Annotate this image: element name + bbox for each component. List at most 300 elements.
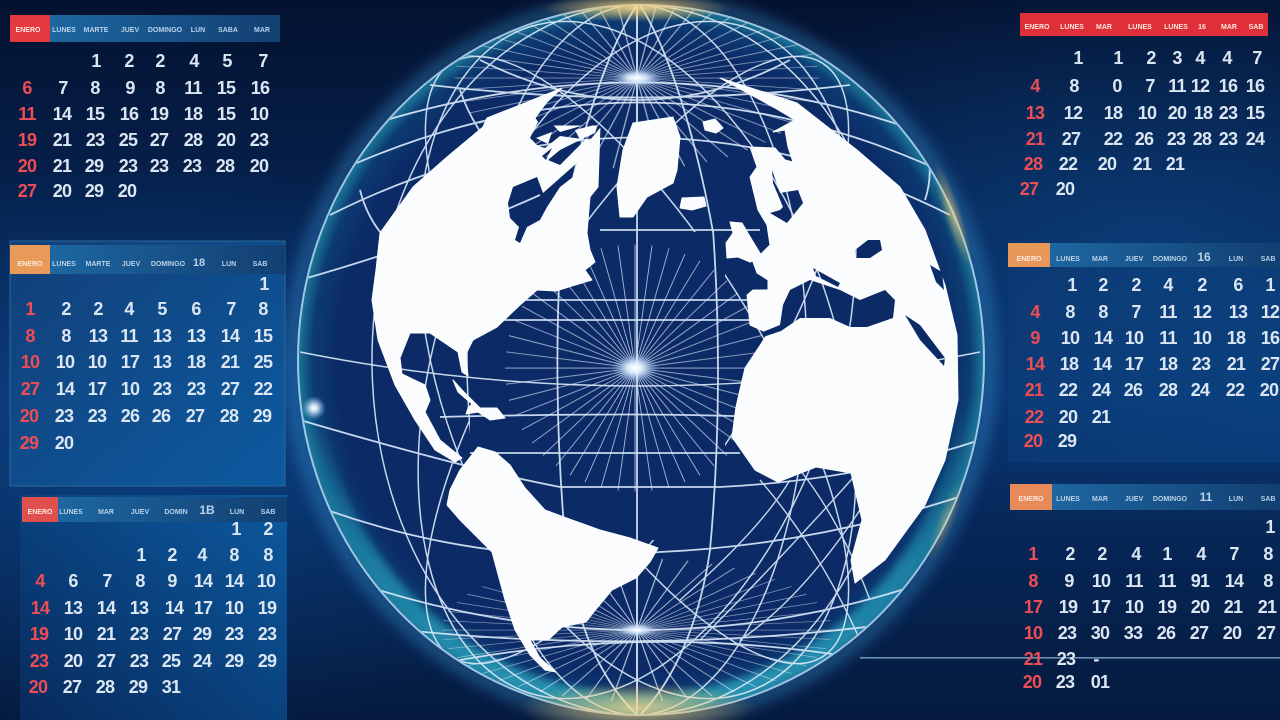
dates: 15 [217, 104, 236, 124]
dates: 7 [1145, 76, 1155, 96]
dates: 23 [1192, 354, 1211, 374]
dates: 20 [55, 433, 74, 453]
dates: 27 [1190, 623, 1209, 643]
dates: 23 [183, 156, 202, 176]
calendar: middle right: SAB [1261, 256, 1275, 263]
dates: 23 [86, 130, 105, 150]
dates: 24 [1092, 380, 1111, 400]
dates: 28 [96, 677, 115, 697]
header bar [22, 497, 287, 522]
dates: 21 [53, 156, 72, 176]
dates: 20 [1024, 431, 1043, 451]
calendar: top right: MAR [1221, 24, 1237, 31]
dates: 27 [97, 651, 116, 671]
dates: 29 [193, 624, 212, 644]
dates: 17 [1092, 597, 1111, 617]
dates: 24 [1246, 129, 1265, 149]
dates: 8 [155, 78, 165, 98]
dates: 20 [29, 677, 48, 697]
dates: 18 [1060, 354, 1079, 374]
dates: 14 [194, 571, 213, 591]
dates: 1 [91, 51, 101, 71]
dates: 29 [85, 181, 104, 201]
dates: 23 [225, 624, 244, 644]
dates: 29 [1058, 431, 1077, 451]
calendar: top left [10, 15, 280, 201]
bright star points [302, 70, 661, 636]
calendar: middle right [1008, 243, 1280, 463]
dates: 1 [1162, 544, 1172, 564]
dates: 10 [1125, 328, 1144, 348]
dates: 9 [1030, 328, 1040, 348]
calendar: top left: LUN [191, 27, 205, 34]
dates: 21 [221, 352, 240, 372]
dates: 7 [102, 571, 112, 591]
dates: 14 [97, 598, 116, 618]
calendar: bottom right: MAR [1092, 496, 1108, 503]
dates: 2 [155, 51, 165, 71]
dates: 29 [20, 433, 39, 453]
dates: 18 [1194, 103, 1213, 123]
calendar: bottom left: LUNES [59, 509, 83, 516]
dates: 21 [1258, 597, 1277, 617]
dates: 17 [121, 352, 140, 372]
dates: 4 [189, 51, 199, 71]
dates: 13 [64, 598, 83, 618]
dates: 2 [1131, 275, 1141, 295]
dates: 2 [167, 545, 177, 565]
dates: 20 [1223, 623, 1242, 643]
ray bursts [442, 0, 832, 702]
dates: 20 [1260, 380, 1279, 400]
calendar: top left: MARTE [84, 27, 109, 34]
calendar: bottom right: LUNES [1056, 496, 1080, 503]
dates [1020, 48, 1265, 199]
dates [1023, 517, 1277, 692]
dates: 8 [25, 326, 35, 346]
dates: 18 [184, 104, 203, 124]
dates: 6 [1233, 275, 1243, 295]
dates: 20 [1168, 103, 1187, 123]
dates: 26 [1124, 380, 1143, 400]
dates: 23 [130, 651, 149, 671]
calendar: bottom right: 11 [1200, 490, 1213, 504]
horizontal light line [860, 657, 1280, 659]
dates: 14 [1225, 571, 1244, 591]
calendar: top right: ENERO [1025, 24, 1050, 31]
dates: 19 [18, 130, 37, 150]
dates: 10 [1092, 571, 1111, 591]
dates: 14 [221, 326, 240, 346]
dates: 7 [258, 51, 268, 71]
dates: 8 [263, 545, 273, 565]
dates: 10 [1138, 103, 1157, 123]
calendar: top right: 16 [1198, 24, 1206, 31]
dates: 19 [258, 598, 277, 618]
dates: 27 [1257, 623, 1276, 643]
dates: 4 [197, 545, 207, 565]
dates: 19 [150, 104, 169, 124]
dates: 1 [1067, 275, 1077, 295]
dates: 16 [1219, 76, 1238, 96]
dates: 20 [1023, 672, 1042, 692]
dates: 18 [1104, 103, 1123, 123]
dates: 9 [125, 78, 135, 98]
land: Iceland [680, 197, 706, 210]
dates: 2 [1146, 48, 1156, 68]
dates: 16 [120, 104, 139, 124]
dates: 26 [152, 406, 171, 426]
calendar: top left: ENERO [16, 27, 41, 34]
dates: 8 [61, 326, 71, 346]
land masses [372, 78, 958, 672]
dates: 28 [1193, 129, 1212, 149]
dates: 2 [93, 299, 103, 319]
dates: 20 [1059, 407, 1078, 427]
dates: 10 [1125, 597, 1144, 617]
dates: 14 [53, 104, 72, 124]
dates: 17 [1024, 597, 1043, 617]
dates: 29 [225, 651, 244, 671]
dates: 14 [31, 598, 50, 618]
dates: 1 [1073, 48, 1083, 68]
dates: 18 [187, 352, 206, 372]
calendar: top left: JUEV [121, 27, 139, 34]
dates: 21 [97, 624, 116, 644]
dates: 20 [64, 651, 83, 671]
dates: 8 [1263, 544, 1273, 564]
dates: 24 [193, 651, 212, 671]
dates: 8 [1028, 571, 1038, 591]
dates: 20 [1098, 154, 1117, 174]
dates: 23 [187, 379, 206, 399]
dates: 20 [20, 406, 39, 426]
dates: 13 [130, 598, 149, 618]
land: Greenland [617, 117, 680, 217]
dates: 12 [1064, 103, 1083, 123]
land: North America [372, 88, 600, 462]
dates: 4 [1030, 76, 1040, 96]
calendar: bottom left: LUN [230, 509, 244, 516]
dates: 20 [118, 181, 137, 201]
header bar [10, 245, 285, 274]
dates: 22 [1059, 380, 1078, 400]
dates: 4 [35, 571, 45, 591]
calendar: bottom right [1010, 484, 1280, 692]
dates [18, 51, 270, 201]
dates: 12 [1193, 302, 1212, 322]
dates: 10 [56, 352, 75, 372]
dates: 27 [1020, 179, 1039, 199]
calendar: bottom right: DOMINGO [1153, 496, 1188, 503]
dates: 15 [217, 78, 236, 98]
calendar: top right [1020, 13, 1268, 199]
calendar: bottom left: DOMIN [164, 509, 188, 516]
dates: 21 [1092, 407, 1111, 427]
dates: 14 [1094, 328, 1113, 348]
header bar [1020, 13, 1268, 36]
dates: 8 [258, 299, 268, 319]
dates: 9 [167, 571, 177, 591]
dates: 01 [1091, 672, 1110, 692]
calendar: middle right: 16 [1197, 250, 1211, 264]
calendar: bottom right: SAB [1261, 496, 1275, 503]
land: Svalbard [703, 119, 723, 133]
dates: 31 [162, 677, 181, 697]
calendar: middle right: ENERO [1017, 256, 1042, 263]
dates: 10 [1024, 623, 1043, 643]
calendar: top right: LUNES [1164, 24, 1188, 31]
dates: 21 [1026, 129, 1045, 149]
dates: 13 [1026, 103, 1045, 123]
calendar: bottom left: SAB [261, 509, 275, 516]
calendar: middle right: MAR [1092, 256, 1108, 263]
dates: 10 [257, 571, 276, 591]
dates: 14 [225, 571, 244, 591]
dates: 11 [1159, 328, 1177, 348]
dates: 19 [1158, 597, 1177, 617]
dates: 17 [88, 379, 107, 399]
dates: 11 [184, 78, 202, 98]
dates: 26 [121, 406, 140, 426]
globe [293, 0, 989, 720]
calendar: middle left: ENERO [18, 261, 43, 268]
panel [10, 241, 285, 486]
globe outer glow [293, 2, 989, 718]
dates: 12 [1191, 76, 1210, 96]
dates: 4 [1222, 48, 1232, 68]
dates: 2 [124, 51, 134, 71]
calendar: middle left: JUEV [122, 261, 140, 268]
dates: 28 [184, 130, 203, 150]
dates [1024, 275, 1280, 451]
dates: 15 [254, 326, 273, 346]
dates: 22 [1226, 380, 1245, 400]
dates: 23 [30, 651, 49, 671]
dates: 23 [55, 406, 74, 426]
dates: 25 [254, 352, 273, 372]
dates: 7 [1131, 302, 1141, 322]
dates: 21 [1227, 354, 1246, 374]
dates: 10 [1061, 328, 1080, 348]
dates: 0 [1112, 76, 1122, 96]
dates: 7 [1229, 544, 1239, 564]
header bar [1008, 243, 1280, 267]
dates: 9 [1064, 571, 1074, 591]
dates: 6 [191, 299, 201, 319]
dates: 3 [1172, 48, 1182, 68]
dates: 23 [258, 624, 277, 644]
dates: 8 [1098, 302, 1108, 322]
dates: 27 [63, 677, 82, 697]
dates: 8 [229, 545, 239, 565]
land: British Isles [726, 222, 763, 262]
dates: 11 [1158, 571, 1176, 591]
dates: 23 [1219, 129, 1238, 149]
calendar: bottom left: 1B [199, 503, 215, 517]
calendar: top left: MAR [254, 27, 270, 34]
dates: 27 [163, 624, 182, 644]
dates: 8 [135, 571, 145, 591]
dates: 28 [220, 406, 239, 426]
dates: 4 [1196, 544, 1206, 564]
dates: 20 [1056, 179, 1075, 199]
land: Eurasia and Africa [720, 78, 958, 583]
dates: 2 [263, 519, 273, 539]
dates: 1 [259, 274, 269, 294]
dates: 29 [258, 651, 277, 671]
land: Cuba and Caribbean [453, 380, 505, 420]
dates: 27 [221, 379, 240, 399]
dates: 2 [61, 299, 71, 319]
dates: 23 [130, 624, 149, 644]
dates: 28 [1024, 154, 1043, 174]
dates: 23 [150, 156, 169, 176]
dates: 7 [58, 78, 68, 98]
dates: 4 [1163, 275, 1173, 295]
dates: 28 [1159, 380, 1178, 400]
dates: 21 [1025, 380, 1044, 400]
dates: 2 [1097, 544, 1107, 564]
dates: 21 [1024, 649, 1043, 669]
dates: 20 [18, 156, 37, 176]
dates: 33 [1124, 623, 1143, 643]
dates: 23 [1219, 103, 1238, 123]
dates: 20 [53, 181, 72, 201]
calendar: bottom left: ENERO [28, 509, 53, 516]
dates: 7 [226, 299, 236, 319]
calendar: middle right: DOMINGO [1153, 256, 1188, 263]
calendar: bottom right: LUN [1229, 496, 1243, 503]
calendar: middle left: 18 [193, 257, 205, 269]
dates: 1 [1028, 544, 1038, 564]
gold glows [517, 0, 979, 720]
dates: 23 [119, 156, 138, 176]
calendar: bottom right: ENERO [1019, 496, 1044, 503]
dates: 21 [1224, 597, 1243, 617]
dates: 14 [1093, 354, 1112, 374]
dates: - [1093, 649, 1099, 669]
dates: 17 [194, 598, 213, 618]
dates: 7 [1252, 48, 1262, 68]
dates: 10 [64, 624, 83, 644]
dates: 23 [1167, 129, 1186, 149]
dates: 4 [1030, 302, 1040, 322]
dates: 27 [150, 130, 169, 150]
dates: 11 [1125, 571, 1143, 591]
dates: 1 [136, 545, 146, 565]
dates: 20 [217, 130, 236, 150]
dates: 29 [253, 406, 272, 426]
dates: 1 [1265, 517, 1275, 537]
dates: 18 [1227, 328, 1246, 348]
dates: 27 [186, 406, 205, 426]
calendar: top right: LUNES [1128, 24, 1152, 31]
calendar: middle left: LUN [222, 261, 236, 268]
dates: 2 [1197, 275, 1207, 295]
dates: 23 [1056, 672, 1075, 692]
dates: 26 [1157, 623, 1176, 643]
calendar: top right: MAR [1096, 24, 1112, 31]
dates: 10 [88, 352, 107, 372]
dates: 1 [231, 519, 241, 539]
dates: 22 [1059, 154, 1078, 174]
dates: 2 [1065, 544, 1075, 564]
calendar: bottom right: JUEV [1125, 496, 1143, 503]
calendar: middle right: LUNES [1056, 256, 1080, 263]
panel [1008, 243, 1280, 463]
calendar: top right: SAB [1249, 24, 1263, 31]
calendar: middle right: LUN [1229, 256, 1243, 263]
dates: 13 [153, 326, 172, 346]
dates: 15 [1246, 103, 1265, 123]
dates: 27 [1261, 354, 1280, 374]
dates: 13 [187, 326, 206, 346]
calendar: middle left: LUNES [52, 261, 76, 268]
dates [29, 519, 277, 697]
dates: 20 [1191, 597, 1210, 617]
dates: 27 [1062, 129, 1081, 149]
dates: 6 [22, 78, 32, 98]
calendar: top left: SABA [218, 27, 238, 34]
dates: 14 [56, 379, 75, 399]
dates: 22 [254, 379, 273, 399]
calendar: bottom left: MAR [98, 509, 114, 516]
dates: 4 [124, 299, 134, 319]
dates: 23 [250, 130, 269, 150]
dates: 22 [1025, 407, 1044, 427]
header bar [1010, 484, 1280, 510]
calendar: top left: DOMINGO [148, 27, 183, 34]
land: South America [447, 447, 658, 672]
dates: 1 [1113, 48, 1123, 68]
dates: 25 [119, 130, 138, 150]
dates [20, 274, 273, 453]
dates: 17 [1125, 354, 1144, 374]
dates: 14 [165, 598, 184, 618]
dates: 11 [1159, 302, 1177, 322]
calendar: top right: LUNES [1060, 24, 1084, 31]
dates: 26 [1135, 129, 1154, 149]
calendar: bottom left: JUEV [131, 509, 149, 516]
dates: 27 [21, 379, 40, 399]
dates: 10 [21, 352, 40, 372]
dates: 13 [89, 326, 108, 346]
calendar: middle left [10, 241, 285, 486]
dates: 10 [121, 379, 140, 399]
dates: 23 [1058, 623, 1077, 643]
dates: 28 [216, 156, 235, 176]
dates: 8 [1065, 302, 1075, 322]
globe ocean [299, 6, 983, 714]
calendar: middle left: SAB [253, 261, 267, 268]
dates: 1 [25, 299, 35, 319]
dates: 21 [1166, 154, 1185, 174]
dates: 16 [1246, 76, 1265, 96]
dates: 29 [129, 677, 148, 697]
globe grid lines [300, 0, 980, 720]
dates: 10 [250, 104, 269, 124]
header bar [10, 15, 280, 42]
lower rim teal glow [312, 417, 969, 714]
dates: 23 [1057, 649, 1076, 669]
dates: 29 [85, 156, 104, 176]
dates: 5 [157, 299, 167, 319]
dates: 91 [1191, 571, 1210, 591]
dates: 4 [1131, 544, 1141, 564]
dates: 1 [1265, 275, 1275, 295]
dates: 5 [222, 51, 232, 71]
